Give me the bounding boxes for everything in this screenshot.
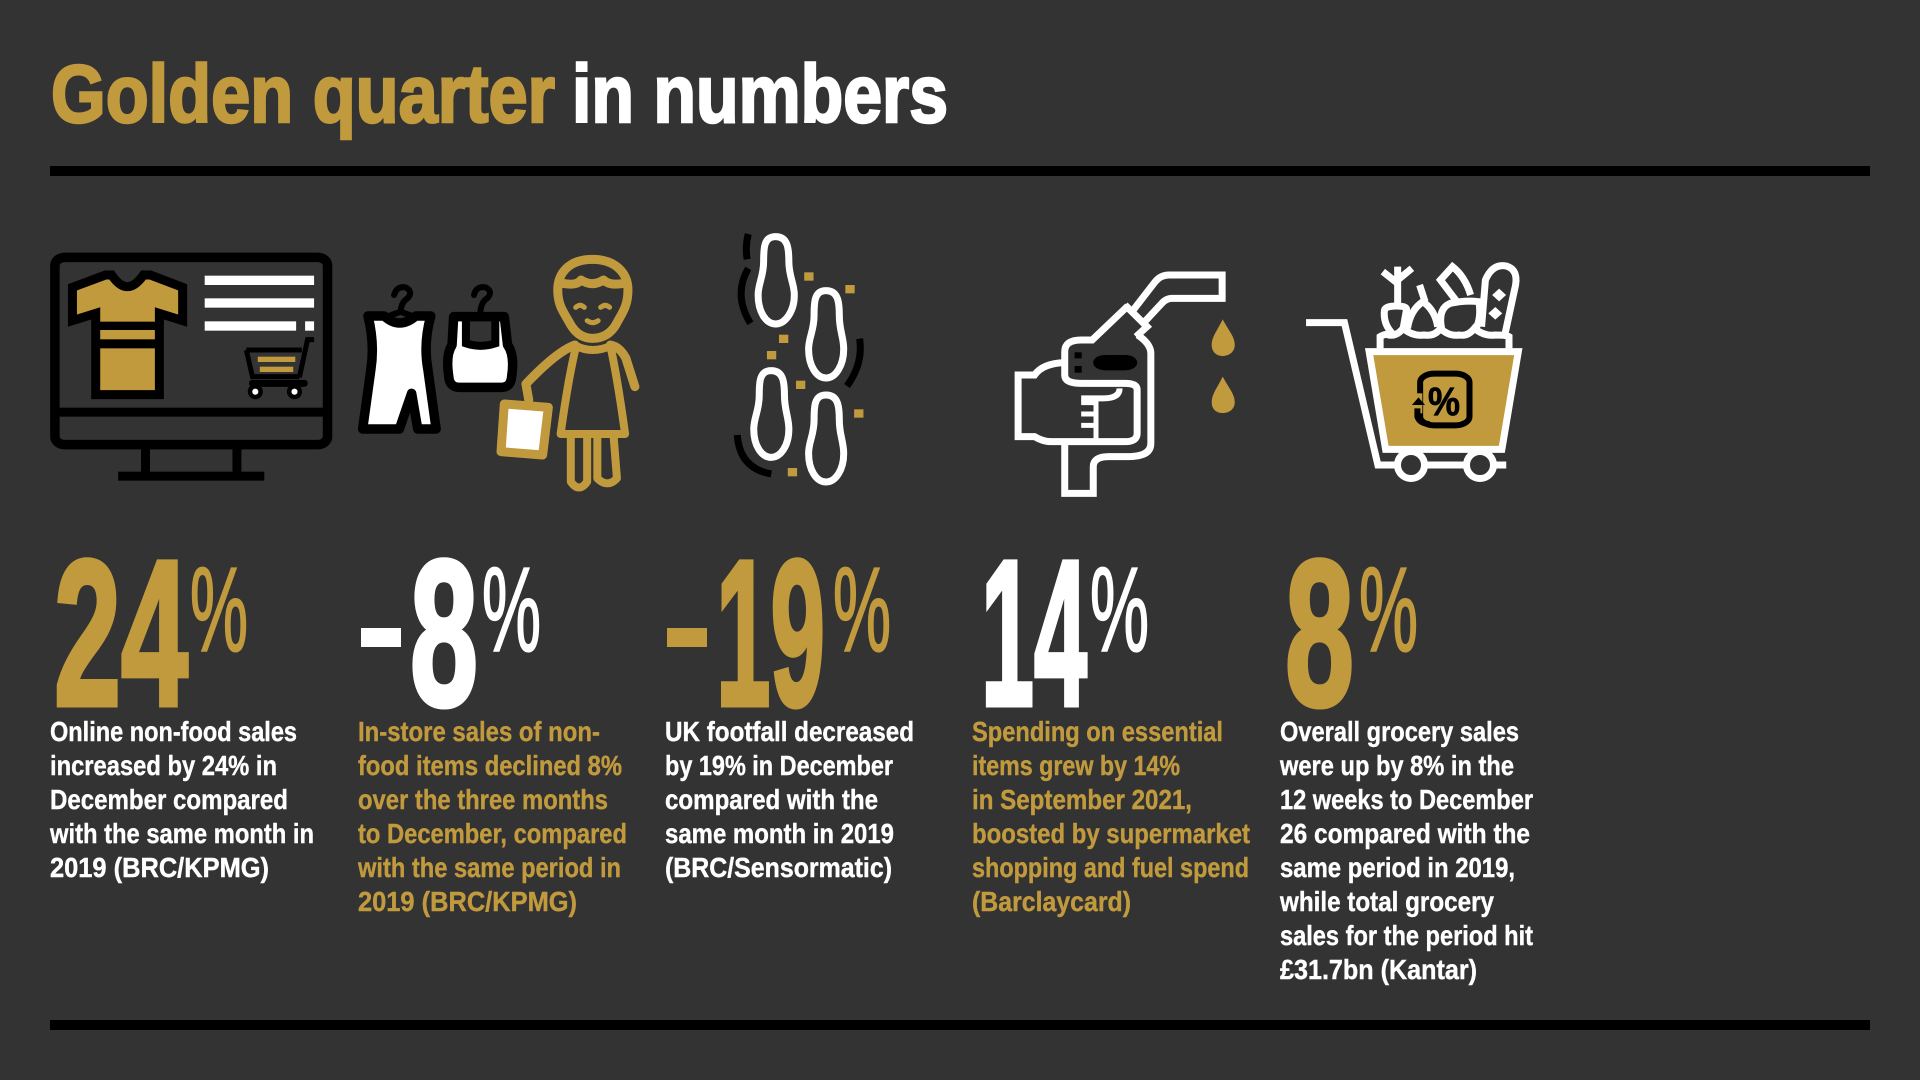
stat: 14% essential spending: items grew by 14% — [972, 750, 1180, 781]
stat: 14% essential spending: (Barclaycard) — [972, 886, 1131, 917]
icon: online shopping monitor — [55, 257, 328, 481]
stat: -8% in-store non-food sales: 8 — [410, 518, 478, 750]
stat: 24% online non-food sales: % — [190, 543, 248, 677]
stat: -8% in-store non-food sales: In-store sales of non- — [358, 716, 600, 747]
title: Golden quarter — [51, 49, 555, 140]
stat: 8% grocery sales: while total grocery — [1279, 886, 1494, 917]
stat: 8% grocery sales: £31.7bn (Kantar) — [1280, 954, 1477, 985]
stat: -19% UK footfall: compared with the — [665, 784, 878, 815]
stat: -19% UK footfall: UK footfall decreased — [665, 716, 914, 747]
stat: 8% grocery sales: were up by 8% in the — [1279, 750, 1514, 781]
stat: 24% online non-food sales: with the same month in — [49, 818, 314, 849]
icon: grocery cart: % — [1428, 380, 1460, 424]
stat: -19% UK footfall: % — [833, 543, 891, 677]
stat: -19% UK footfall — [665, 518, 914, 883]
stat: -19% UK footfall: by 19% in December — [665, 750, 893, 781]
title: in numbers — [572, 49, 948, 140]
stat: 14% essential spending: boosted by supermarket — [972, 818, 1250, 849]
stat: -8% in-store non-food sales: to December, compared — [358, 818, 627, 849]
stat: 14% essential spending: % — [1090, 543, 1149, 677]
stat: 24% online non-food sales: 2019 (BRC/KPMG) — [50, 852, 269, 883]
stat: 8% grocery sales: 8 — [1285, 518, 1354, 750]
stat: -8% in-store non-food sales: with the same period in — [357, 852, 621, 883]
stat: -8% in-store non-food sales — [357, 518, 627, 917]
stat: 24% online non-food sales: December compared — [50, 784, 288, 815]
stat: -19% UK footfall: 19 — [716, 518, 825, 750]
stat: 14% essential spending — [972, 518, 1250, 917]
stat: 8% grocery sales: 26 compared with the — [1280, 818, 1530, 849]
icon: grocery cart — [1306, 266, 1518, 478]
stat: -8% in-store non-food sales: % — [482, 543, 541, 677]
stat: 8% grocery sales: Overall grocery sales — [1280, 716, 1519, 747]
stat: 14% essential spending: shopping and fuel spend — [972, 852, 1249, 883]
stat: 24% online non-food sales: increased by 24% in — [50, 750, 277, 781]
stat: -8% in-store non-food sales: food items declined 8% — [358, 750, 622, 781]
title — [51, 49, 948, 140]
stat: 24% online non-food sales: 24 — [54, 518, 188, 750]
stat: 8% grocery sales: sales for the period hit — [1280, 920, 1533, 951]
stat: -8% in-store non-food sales: 2019 (BRC/KPMG) — [358, 886, 577, 917]
stat: 8% grocery sales: same period in 2019, — [1280, 852, 1515, 883]
stat: -8% in-store non-food sales: over the three months — [358, 784, 608, 815]
stat: 8% grocery sales: 12 weeks to December — [1280, 784, 1533, 815]
stat: 14% essential spending: in September 2021, — [972, 784, 1192, 815]
stat: -19% UK footfall: same month in 2019 — [665, 818, 894, 849]
stat: -19% UK footfall: (BRC/Sensormatic) — [665, 852, 892, 883]
stat: 24% online non-food sales: Online non-food sales — [50, 716, 297, 747]
stat: 8% grocery sales: % — [1359, 543, 1418, 677]
icon: footprints — [737, 234, 863, 482]
icon: fuel pump nozzle — [1018, 275, 1235, 493]
stat: 24% online non-food sales — [49, 518, 314, 883]
stat: 8% grocery sales — [1279, 518, 1533, 985]
stat: 14% essential spending: Spending on essential — [972, 716, 1223, 747]
stat: 14% essential spending: 14 — [981, 518, 1087, 750]
icon: shopper with clothes — [363, 259, 635, 487]
